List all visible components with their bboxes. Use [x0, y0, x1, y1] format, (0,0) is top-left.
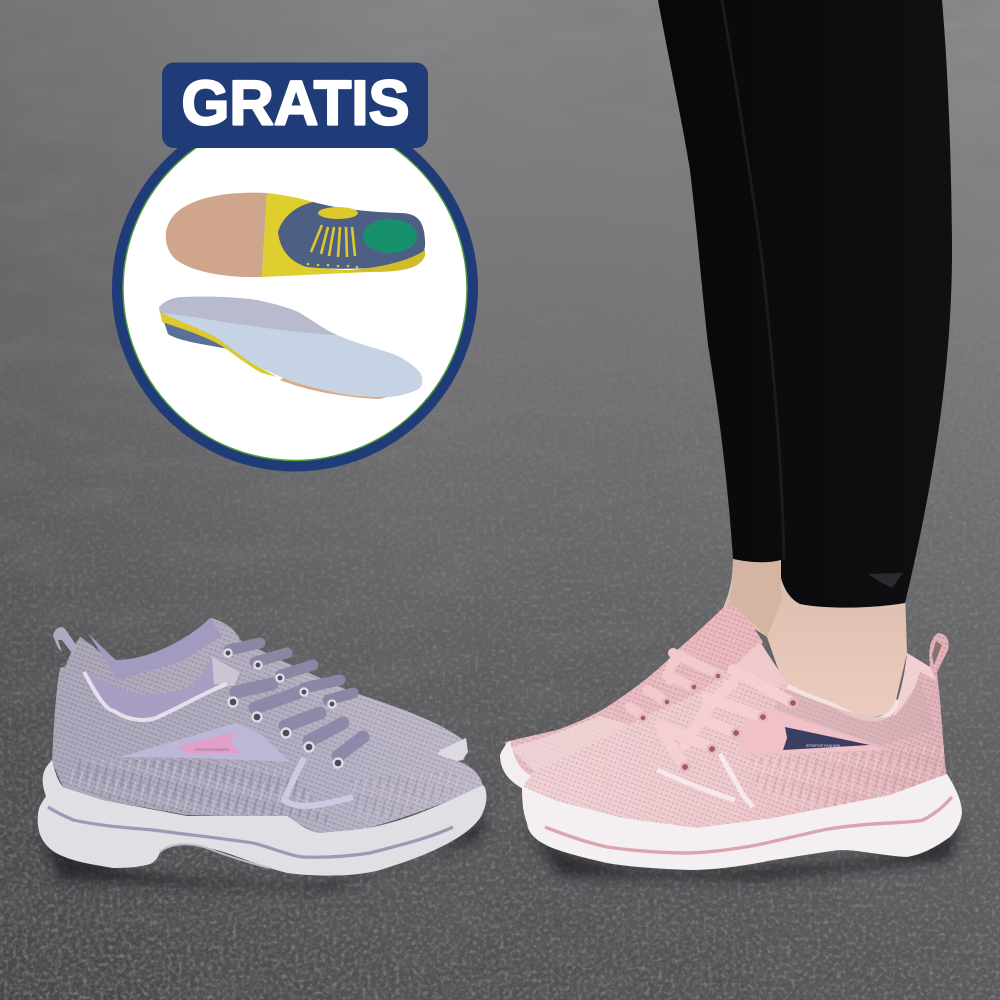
side swoosh	[657, 754, 753, 807]
logo	[783, 727, 870, 750]
collar edge	[84, 672, 227, 720]
pink shoes pair	[500, 607, 962, 870]
logo text: SPORTOP FASHION	[195, 748, 229, 752]
gratis label: GRATIS	[182, 68, 410, 138]
lilac eyelets	[224, 649, 342, 768]
collar lining	[86, 658, 217, 719]
lilac laces	[229, 643, 363, 756]
rear shoe collar interior	[88, 618, 222, 680]
side panel	[737, 708, 885, 755]
circle badge	[112, 106, 478, 472]
front pink sole	[522, 774, 962, 870]
tongue	[733, 642, 787, 692]
rear pink laces	[630, 653, 720, 717]
logo text: SPORTOP FASHION	[806, 744, 840, 748]
heel collar band	[893, 653, 936, 717]
lilac shoes pair	[38, 618, 486, 876]
front pink shoe upper	[523, 633, 949, 830]
legs in black leggings	[658, 0, 952, 608]
rear pink sole	[500, 741, 535, 791]
insole offer circle	[112, 62, 478, 472]
insole side view	[159, 297, 422, 399]
shoe shadows	[38, 805, 962, 890]
gratis banner	[162, 62, 428, 148]
side swoosh	[284, 758, 353, 806]
pull tab opening	[932, 641, 942, 665]
rear pink shoe	[500, 607, 763, 791]
grey heel mesh	[773, 680, 935, 745]
collar edge	[787, 686, 898, 719]
front lilac sole	[38, 760, 486, 876]
front lilac shoe upper	[52, 656, 483, 835]
rear sole toe	[430, 738, 468, 768]
pink eyelets	[639, 672, 797, 771]
logo accent	[177, 732, 240, 753]
rear lilac shoe	[53, 618, 467, 770]
side panel	[120, 723, 290, 762]
skin: ankles	[723, 555, 907, 718]
rear pull tab	[53, 627, 76, 654]
insole top view	[166, 193, 425, 277]
rear toe light area	[510, 716, 650, 772]
tongue	[212, 657, 240, 686]
front pink laces	[660, 670, 793, 767]
